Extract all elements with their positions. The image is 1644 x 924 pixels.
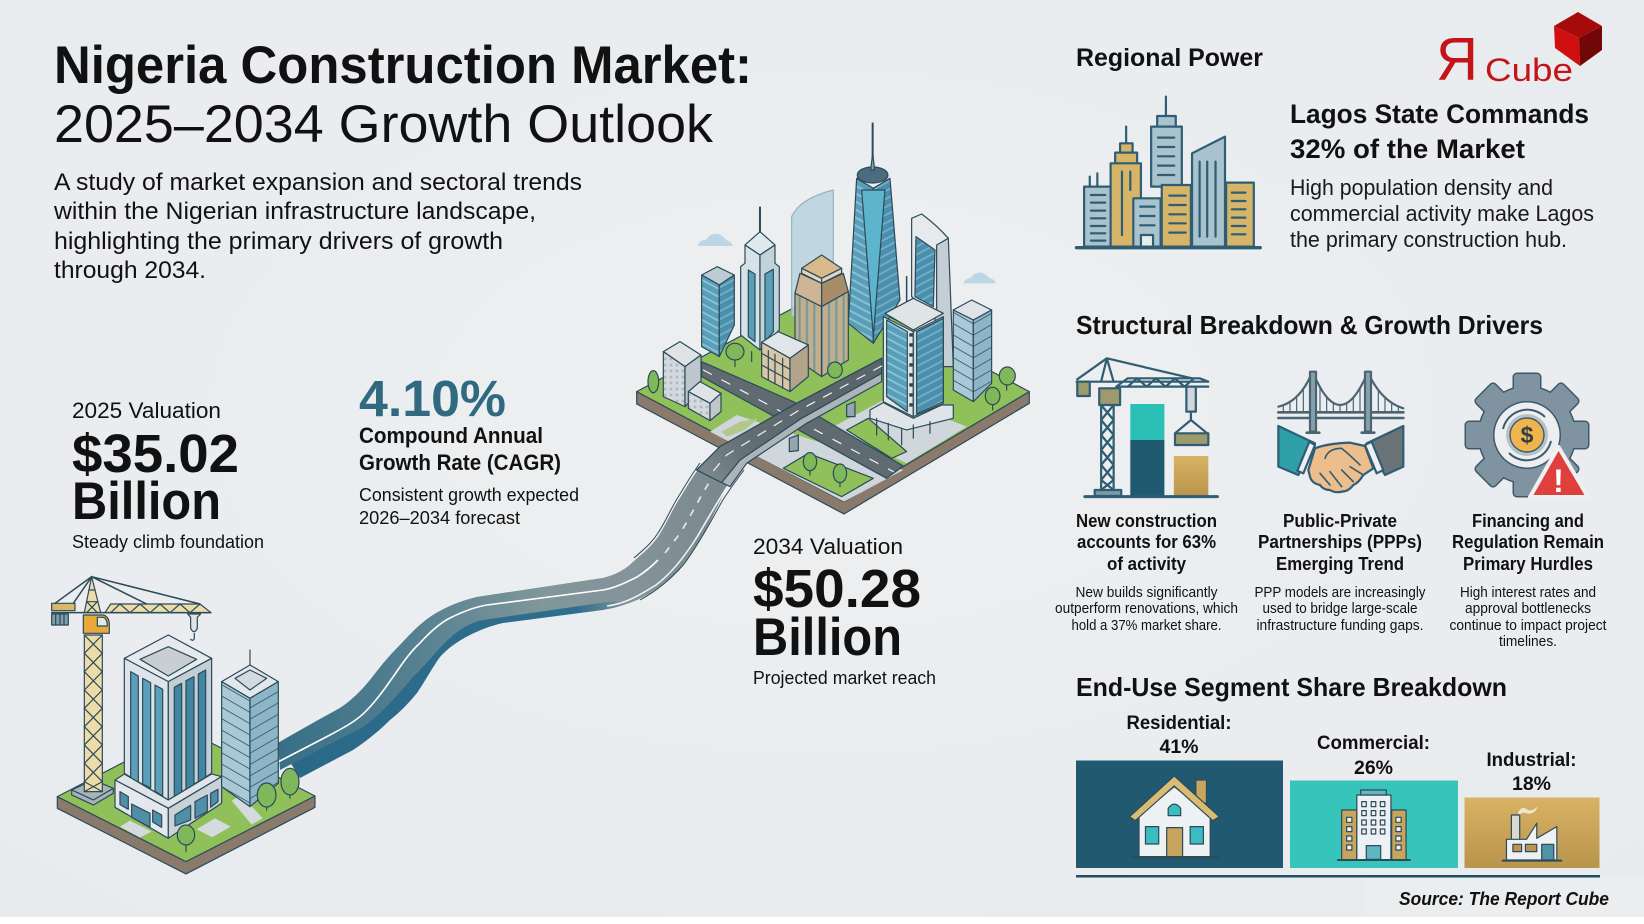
- segment: commercial: [1290, 732, 1458, 868]
- cross street: [702, 362, 903, 478]
- lagos text block: [1290, 99, 1594, 252]
- right blue tower: [953, 300, 992, 402]
- icon: bridge and handshake: [1278, 372, 1403, 492]
- icon: gear with warning: $: [1521, 422, 1534, 448]
- structural breakdown heading: Structural Breakdown & Growth Drivers: [1076, 310, 1543, 340]
- curved back tower: [912, 214, 953, 367]
- driver: public-private partnerships: infrastructure funding gaps.: [1256, 618, 1424, 634]
- grey office and annex: [663, 342, 721, 421]
- driver: public-private partnerships: used to bridge large-scale: [1262, 601, 1418, 617]
- lagos text block: High population density and: [1290, 175, 1553, 200]
- intro text: highlighting the primary drivers of growth: [54, 228, 503, 255]
- intro text: A study of market expansion and sectoral trends: [54, 169, 582, 196]
- driver: new construction: outperform renovations, which: [1055, 601, 1238, 617]
- driver: new construction: hold a 37% market share.: [1072, 618, 1222, 634]
- driver: financing and regulation: timelines.: [1499, 634, 1557, 650]
- city trees: [648, 343, 1015, 487]
- intro text: [53, 169, 582, 284]
- driver: public-private partnerships: [1254, 510, 1426, 634]
- title: [54, 36, 752, 154]
- small beige block: [762, 332, 808, 392]
- lagos text block: commercial activity make Lagos: [1290, 201, 1594, 226]
- tower crane: [52, 577, 211, 805]
- segment: industrial: [1464, 749, 1600, 868]
- driver: financing and regulation: Primary Hurdles: [1463, 553, 1593, 574]
- icon: factory: [1503, 806, 1561, 861]
- driver: financing and regulation: Financing and: [1472, 510, 1584, 531]
- spire tower: [741, 207, 779, 350]
- logo: RCube: Я: [1436, 26, 1478, 93]
- front blue tower: [870, 277, 953, 445]
- driver: new construction: of activity: [1107, 553, 1187, 574]
- driver: new construction: New builds significantly: [1076, 585, 1218, 601]
- title: Nigeria Construction Market:: [54, 36, 752, 95]
- driver: financing and regulation: [1450, 510, 1606, 650]
- striped side tower: [222, 650, 278, 807]
- title: 2025–2034 Growth Outlook: [54, 95, 714, 154]
- segment: residential: [1076, 712, 1283, 868]
- driver: public-private partnerships: Emerging Trend: [1276, 553, 1404, 574]
- lagos text block: 32% of the Market: [1290, 134, 1525, 164]
- driver: public-private partnerships: Partnerships (PPPs): [1258, 531, 1422, 552]
- CAGR stat: 2026–2034 forecast: [359, 507, 520, 528]
- 2034 valuation stat: Projected market reach: [753, 667, 936, 688]
- driver: new construction: New construction: [1076, 510, 1217, 531]
- segment: residential: 41%: [1159, 736, 1199, 758]
- tan tower: [795, 255, 848, 377]
- CAGR stat: Compound Annual: [359, 423, 543, 448]
- driver: public-private partnerships: PPP models are increasingly: [1254, 585, 1426, 601]
- end-use heading: End-Use Segment Share Breakdown: [1076, 672, 1507, 702]
- 2025 valuation stat: $35.02: [72, 424, 239, 484]
- segment: industrial: Industrial:: [1486, 749, 1576, 771]
- 2025 valuation stat: Steady climb foundation: [72, 531, 264, 552]
- source note: Source: The Report Cube: [1399, 889, 1609, 909]
- driver: financing and regulation: continue to impact project: [1450, 618, 1606, 634]
- winding growth road: [278, 450, 750, 778]
- CAGR stat: 4.10%: [359, 370, 506, 427]
- intro text: through 2034.: [54, 257, 206, 284]
- 2034 valuation stat: 2034 Valuation: [753, 534, 903, 559]
- handshake: [1278, 426, 1403, 492]
- ground plate: [57, 730, 315, 874]
- 2025 valuation stat: 2025 Valuation: [72, 398, 221, 423]
- tallest glass tower: [848, 123, 900, 343]
- driver: new construction: [1055, 510, 1238, 634]
- segment: commercial: Commercial:: [1317, 732, 1430, 754]
- icon: office building: [1338, 790, 1410, 860]
- 2025 valuation stat: Billion: [72, 472, 221, 531]
- lagos text block: Lagos State Commands: [1290, 99, 1589, 129]
- segment: commercial: 26%: [1354, 757, 1393, 779]
- icon: house: [1130, 776, 1219, 857]
- tower podium: [115, 774, 222, 838]
- intro text: within the Nigerian infrastructure landscape,: [53, 198, 536, 225]
- icon: crane with bars: [1077, 358, 1217, 497]
- icon: gear with warning: !: [1553, 463, 1564, 499]
- icon: city skyline: [1077, 97, 1260, 248]
- driver: public-private partnerships: Public-Private: [1283, 510, 1397, 531]
- logo: RCube: [1436, 12, 1602, 93]
- driver: financing and regulation: approval bottlenecks: [1465, 601, 1591, 617]
- lagos text block: the primary construction hub.: [1290, 227, 1567, 252]
- CAGR stat: Consistent growth expected: [359, 484, 579, 505]
- 2034 valuation stat: Billion: [753, 608, 902, 667]
- 2034 valuation stat: [753, 534, 936, 688]
- driver: financing and regulation: Regulation Remain: [1452, 531, 1604, 552]
- logo: RCube: Cube: [1485, 52, 1573, 88]
- trees: [177, 768, 299, 852]
- CAGR stat: Growth Rate (CAGR): [359, 450, 561, 475]
- segment: industrial: 18%: [1512, 773, 1551, 795]
- gear body: [1466, 374, 1588, 496]
- CAGR stat: [359, 370, 579, 528]
- main glass tower: [124, 635, 212, 800]
- city ground plate: [637, 287, 1029, 514]
- left blue block: [702, 267, 734, 357]
- chart baseline: [1076, 875, 1600, 878]
- elevated road deck: [697, 358, 882, 487]
- isometric start site with crane and towers: [52, 577, 315, 874]
- regional power heading: Regional Power: [1076, 44, 1263, 72]
- isometric future city: [637, 123, 1029, 514]
- icon: gear with warning: [1466, 374, 1588, 499]
- pale back tower: [792, 190, 833, 317]
- clouds: [697, 234, 996, 283]
- bridge: [1278, 372, 1403, 433]
- segment: residential: Residential:: [1126, 712, 1232, 734]
- driver: financing and regulation: High interest rates and: [1460, 585, 1596, 601]
- 2025 valuation stat: [72, 398, 264, 552]
- driver: new construction: accounts for 63%: [1077, 531, 1216, 552]
- 2034 valuation stat: $50.28: [753, 559, 921, 619]
